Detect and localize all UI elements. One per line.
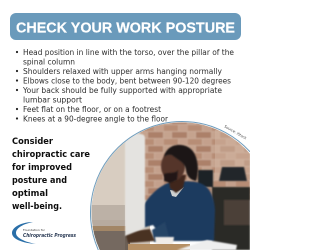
brick wall [140,122,250,200]
callout: consider chiropractic care: for improved [12,163,72,173]
photo background wall [90,122,150,250]
bullet list [16,48,234,124]
hair [164,145,198,181]
bullet list: Head position in line with the torso, over the pillar of the [23,48,234,57]
callout: consider chiropractic care: Consider [12,137,54,147]
bullet list: Elbows close to the body, bent between 90-120 degrees [23,76,231,86]
bullet list: Knees at a 90-degree angle to the floor [23,114,169,124]
collar [170,187,184,197]
callout: consider chiropractic care: chiropractic care [12,150,90,160]
callout: consider chiropractic care [12,137,90,212]
desk items left [90,228,130,250]
title: CHECK YOUR WORK POSTURE [16,20,235,36]
bullet list: Feet flat on the floor, or on a footrest [23,105,161,114]
bullet list: spinal column [23,58,75,66]
sweater arm [152,222,170,242]
mug [154,236,175,244]
title banner [10,13,241,40]
man sweater [140,181,215,241]
dark chair and shelf [198,167,250,250]
photo: man working at computer [90,122,250,250]
forearm and hand [125,229,155,243]
logo: Foundation for Chiropractic Progress [12,222,76,244]
neck [168,175,186,193]
paper [177,240,237,250]
callout: consider chiropractic care: posture and [12,176,67,186]
monitor [125,134,145,236]
face [161,151,185,181]
bullet list: Shoulders relaxed with upper arms hanging normally [23,67,222,76]
logo: Foundation for Chiropractic Progress: Foundation for [23,228,46,232]
callout: consider chiropractic care: optimal [12,189,48,199]
beard [164,170,178,183]
bullet list: Your back should be fully supported with appropriate [22,86,222,95]
logo: Foundation for Chiropractic Progress: Chiropractic Progress [23,233,76,239]
table [128,244,190,250]
background [0,0,250,250]
bullet list: lumbar support [23,96,82,104]
callout: consider chiropractic care: well-being. [12,202,62,212]
photo credit: Source: iStock [224,124,248,141]
